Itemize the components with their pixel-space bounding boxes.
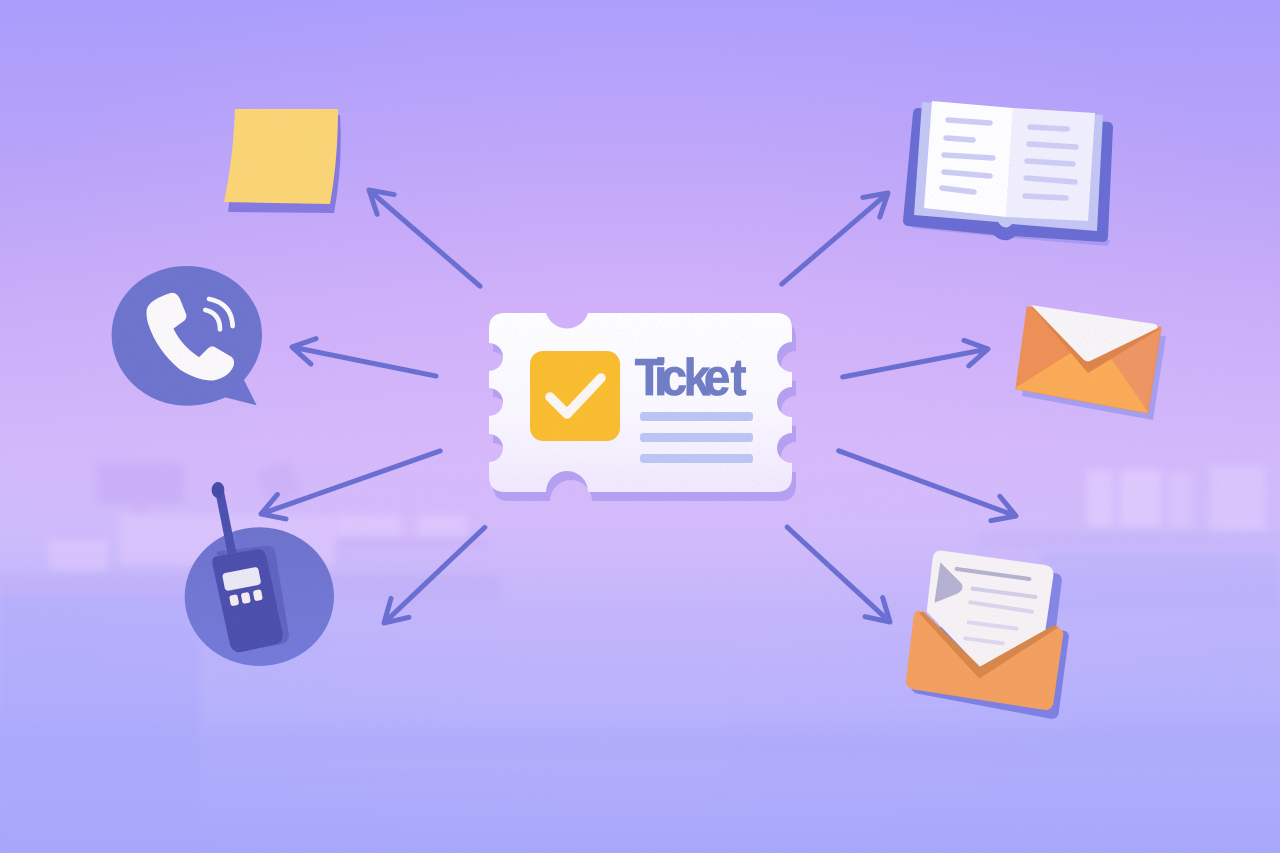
- arrow: to envelope: [840, 336, 990, 390]
- arrow: to sticky note: [360, 180, 489, 296]
- letter shadow: [933, 560, 1062, 637]
- right panel: [1100, 328, 1160, 412]
- radio body: [212, 549, 283, 652]
- handset: [148, 294, 232, 379]
- letter: [927, 551, 1053, 667]
- ticket shadow: [493, 322, 796, 501]
- screen: [222, 567, 261, 591]
- arrow: lower left: [375, 518, 494, 632]
- letter icon: [935, 563, 962, 602]
- icon: walkie-talkie: [185, 482, 334, 666]
- arrow: to open envelope: [778, 518, 899, 632]
- left page: [924, 101, 1013, 217]
- icon: open book: [908, 101, 1110, 246]
- arrow: to book: [773, 183, 896, 294]
- book shadow: [912, 222, 1110, 246]
- central ticket: [489, 313, 796, 501]
- letter lines: [957, 569, 1035, 643]
- left panel: [1017, 308, 1160, 412]
- icon: open envelope with letter: [906, 551, 1069, 719]
- envelope shadow: [911, 627, 1069, 719]
- icon: yellow check box: [530, 351, 620, 441]
- icon: closed envelope: [1017, 305, 1166, 420]
- buttons: [229, 589, 263, 606]
- icon: phone speech bubble: [112, 266, 262, 406]
- bubble: [112, 266, 262, 406]
- flap: [1031, 305, 1158, 361]
- circle backdrop: [185, 527, 334, 666]
- signal waves: [205, 299, 233, 329]
- text lines: [942, 120, 1076, 198]
- arrow: lower right: [834, 439, 1020, 528]
- icon: sticky note: [224, 109, 341, 213]
- blurred office backdrop: [0, 460, 1280, 853]
- cover: [908, 113, 1108, 237]
- ticket body: [489, 313, 792, 492]
- radio shadow: [217, 546, 289, 652]
- ticket text lines: [640, 412, 753, 463]
- right page: [1006, 108, 1095, 221]
- antenna: [212, 482, 232, 553]
- pocket fold: [919, 611, 1058, 679]
- envelope shadow: [1022, 330, 1166, 420]
- page block: [914, 102, 1103, 231]
- arrow: to walkie-talkie: [257, 439, 445, 526]
- bottom fold: [1017, 354, 1147, 412]
- flap shadow: [1031, 306, 1160, 373]
- arrow: to phone: [289, 334, 439, 389]
- ticket label: Ticket: [635, 348, 747, 406]
- envelope pocket: [906, 611, 1063, 710]
